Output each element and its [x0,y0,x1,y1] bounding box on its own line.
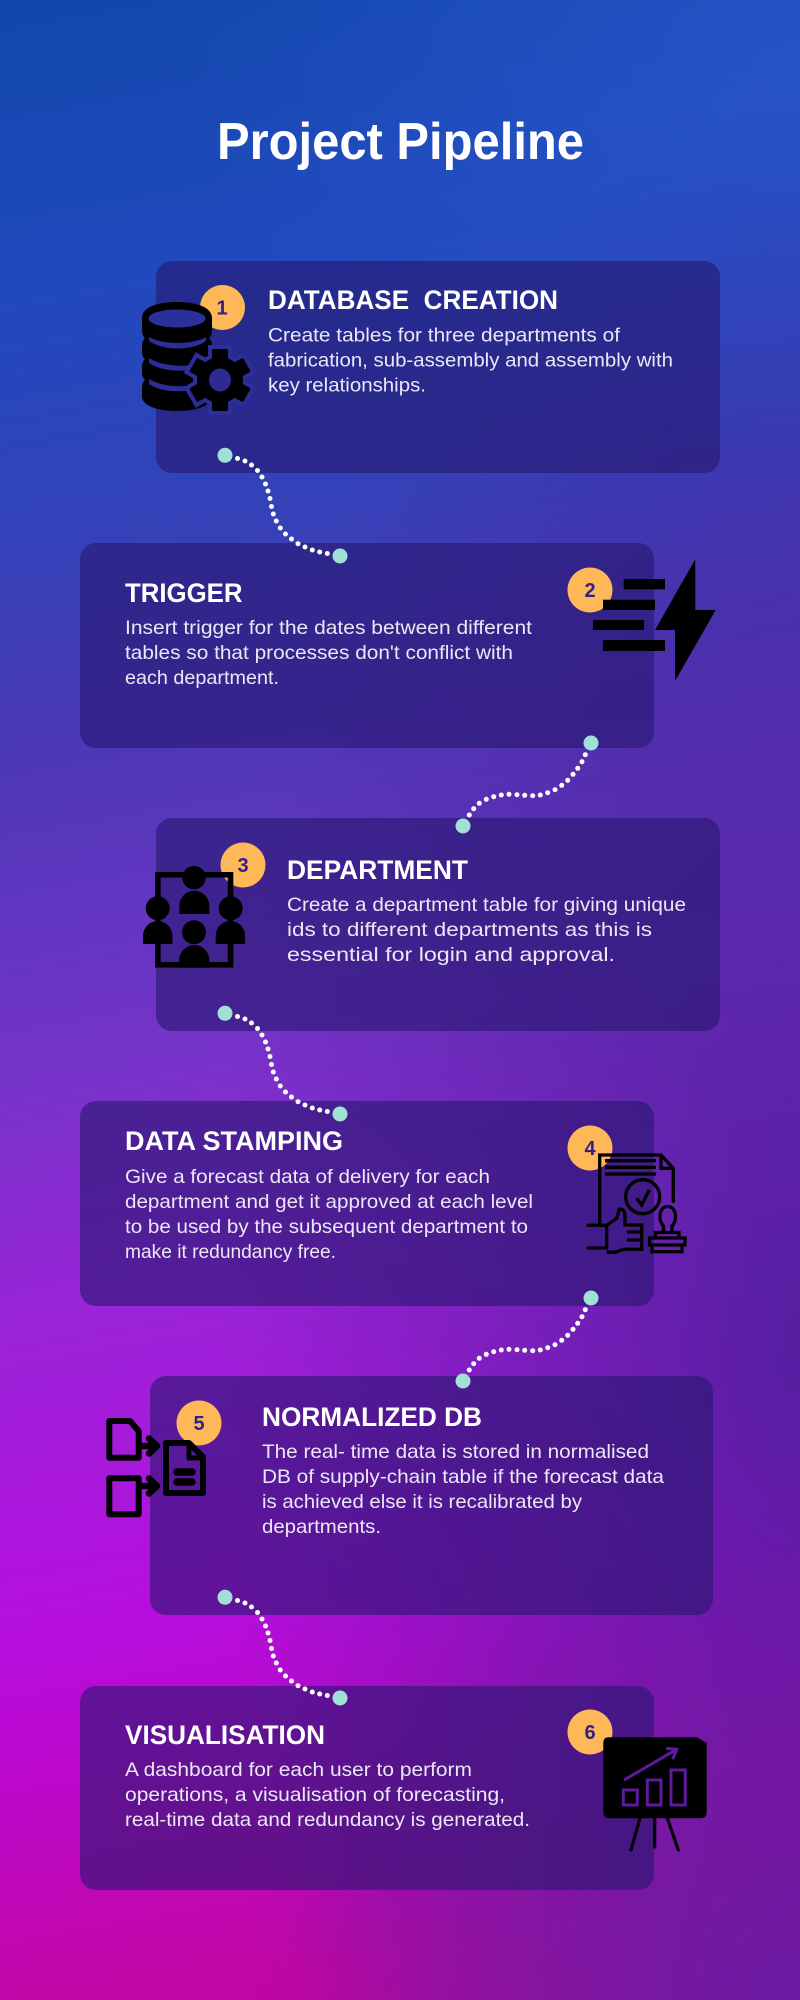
arrow: connector from step 1 to step 2 [218,448,348,564]
heading: trigger: TRIGGER [125,578,242,608]
step number 5: 5 [193,1413,205,1435]
text block: normalized db: is achieved else it is recalibrated by [262,1491,582,1513]
title: Project Pipeline [217,113,584,171]
panel: department [143,818,720,1031]
text block: data stamping: make it redundancy free. [125,1241,336,1263]
icon: team in a frame [143,866,245,968]
panel: trigger [80,543,716,748]
text block: department: essential for login and approval. [287,944,615,966]
arrow: connector from step 3 to step 4 [218,1006,348,1122]
text block: database creation [268,324,673,396]
step number 1 [200,285,245,330]
panel: data stamping [80,1101,685,1306]
step number 6: 6 [584,1722,596,1744]
text block: department: ids to different departments as this is [287,919,652,941]
text block: normalized db: The real- time data is stored in normalised [262,1441,649,1463]
step number 2: 2 [584,580,596,602]
heading: department: DEPARTMENT [287,855,468,885]
text block: database creation: fabrication, sub-assembly and assembly with [268,350,673,372]
step number 4 [568,1126,612,1170]
text block: trigger [125,617,533,689]
heading: data stamping: DATA STAMPING [125,1126,343,1156]
text block: data stamping: to be used by the subsequent department to [125,1216,528,1238]
arrow: connector from step 4 to step 5 [456,1290,598,1388]
text block: normalized db: DB of supply-chain table if the forecast data [262,1466,664,1488]
text block: visualisation: A dashboard for each user to perform [125,1759,472,1781]
text block: visualisation: operations, a visualisation of forecasting, [125,1784,505,1806]
step number 6 [568,1710,612,1754]
text block: normalized db: departments. [262,1516,381,1538]
step number 3 [220,842,266,888]
icon: approved document with stamp [587,1155,685,1252]
text block: department [287,894,686,966]
panel: visualisation [80,1686,707,1890]
arrow: connector from step 2 to step 3 [456,736,598,834]
text block: normalized db [262,1441,664,1538]
heading: database creation: DATABASE CREATION [268,285,558,315]
text block: data stamping [125,1166,533,1263]
heading: normalized db: NORMALIZED DB [262,1402,482,1432]
text block: trigger: each department. [125,667,279,689]
text block: database creation: Create tables for three departments of [268,324,621,346]
text block: database creation: key relationships. [268,374,426,396]
step number 5 [176,1400,222,1446]
panel: database creation [142,261,720,473]
text block: department: Create a department table for giving unique [287,894,686,916]
text block: trigger: Insert trigger for the dates between different [125,617,533,639]
text block: visualisation: real-time data and redundancy is generated. [125,1809,530,1831]
step number 3: 3 [237,855,249,877]
text block: data stamping: Give a forecast data of delivery for each [125,1166,490,1188]
text block: trigger: tables so that processes don't conflict with [125,642,513,664]
icon: documents merging [109,1421,203,1514]
panel: normalized db [109,1376,713,1615]
step number 4: 4 [584,1138,596,1160]
text block: data stamping: department and get it approved at each level [125,1191,533,1213]
text block: visualisation [125,1759,530,1831]
heading: visualisation: VISUALISATION [125,1720,325,1750]
icon: lightning with speed bars [593,559,716,681]
step number 2 [568,568,612,612]
arrow: connector from step 5 to step 6 [218,1590,348,1706]
step number 1: 1 [216,298,228,320]
icon: database with gear [142,302,251,411]
icon: presentation board with rising chart [603,1737,707,1850]
